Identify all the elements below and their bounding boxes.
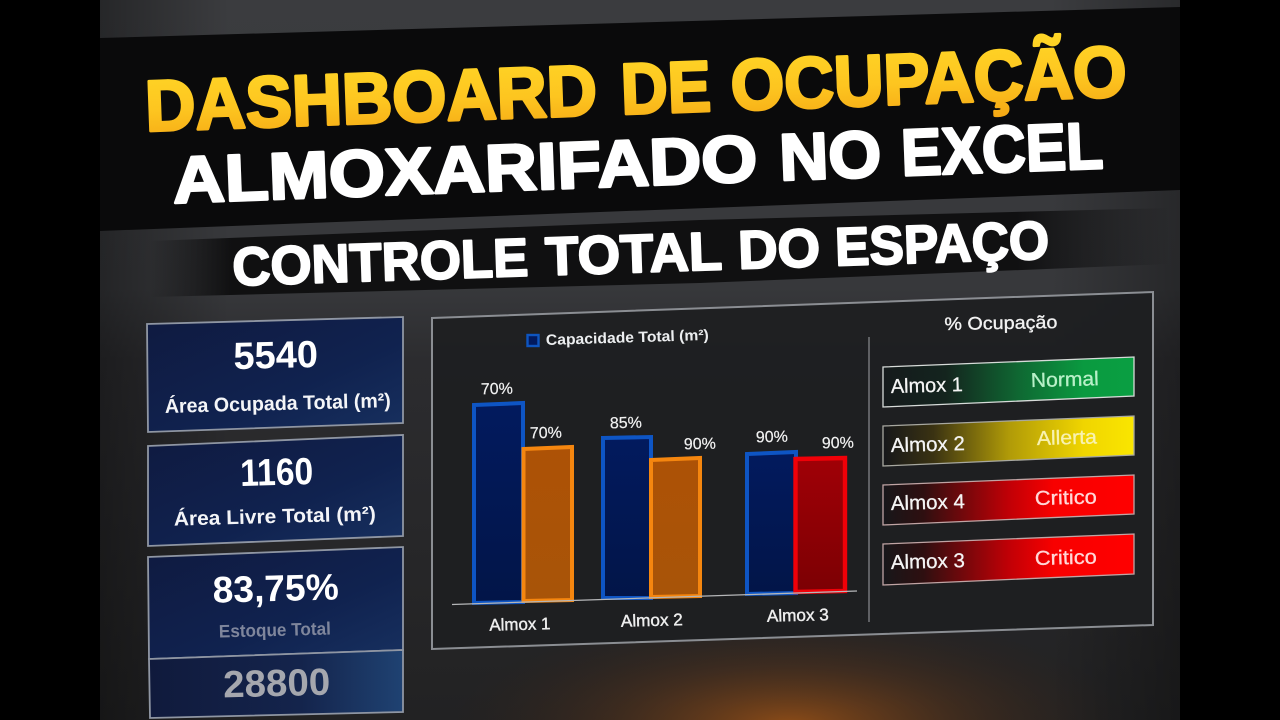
label: área ocupada: Área Ocupada Total (m²) [165, 389, 391, 418]
bar value labels [481, 381, 854, 453]
status: Almox 1 normal: Normal [1031, 368, 1099, 392]
status: Almox 4 crítico: Critico [1035, 486, 1097, 510]
status: Almox 3 crítico: Almox 3 [891, 550, 965, 574]
status: Almox 4 crítico: Almox 4 [891, 491, 965, 515]
title line 1: DE [619, 47, 712, 130]
category labels: Almox 2 [621, 610, 683, 631]
bar: Almox 3 ocupação [796, 458, 845, 592]
title line 1: DASHBOARD [144, 51, 598, 147]
bar: Almox 3 capacidade [747, 452, 796, 594]
title banner [100, 7, 1180, 231]
subtitle: ESPAÇO [834, 211, 1050, 278]
bar: Almox 2 ocupação [651, 458, 700, 597]
category labels: Almox 1 [489, 614, 551, 635]
status: Almox 1 normal: Almox 1 [891, 374, 963, 398]
subtitle: CONTROLE [231, 228, 529, 297]
title line 2: NO [778, 116, 883, 194]
title line 2: EXCEL [900, 108, 1104, 190]
status: Almox 4 crítico [883, 475, 1134, 525]
title line 1 [144, 31, 1128, 147]
title line 2 [171, 108, 1104, 217]
bar value labels: 90% [684, 436, 716, 453]
value: 1160: 1160 [240, 451, 314, 495]
bar: Almox 1 capacidade [474, 403, 523, 603]
bar value labels: 90% [822, 435, 854, 452]
status: Almox 2 alerta: Allerta [1037, 426, 1098, 450]
value: 83,75%: 83,75% [212, 566, 339, 611]
bar chart [452, 327, 857, 635]
label: estoque total: Estoque Total [219, 619, 331, 641]
status: Almox 2 alerta: Almox 2 [891, 433, 965, 457]
chart panel [432, 292, 1153, 649]
KPI card: 28800 [149, 650, 403, 718]
subtitle: DO [737, 218, 821, 281]
category labels [489, 605, 829, 635]
KPI card: estoque total [148, 547, 403, 659]
status: Almox 3 crítico [883, 534, 1134, 585]
status panel [883, 312, 1134, 585]
value: 5540: 5540 [233, 334, 318, 378]
bar value labels: 85% [610, 415, 642, 432]
title line 2: ALMOXARIFADO [171, 121, 759, 217]
subtitle [231, 211, 1050, 297]
category labels: Almox 3 [767, 605, 829, 626]
value: 28800: 28800 [223, 662, 331, 706]
KPI card: área ocupada [147, 317, 403, 432]
subtitle: TOTAL [544, 221, 723, 287]
divider [868, 337, 870, 622]
bar value labels: 70% [481, 381, 513, 398]
status heading: % Ocupação [944, 312, 1058, 334]
legend: Capacidade Total (m²) [546, 327, 709, 349]
status: Almox 2 alerta [883, 416, 1134, 466]
subtitle band [150, 208, 1170, 297]
status: Almox 1 normal [883, 357, 1134, 407]
bar: Almox 2 capacidade [603, 437, 651, 598]
KPI card: área livre [148, 435, 403, 546]
bar value labels: 90% [756, 429, 788, 446]
axis [452, 591, 857, 604]
bar value labels: 70% [530, 425, 562, 442]
label: área livre: Área Livre Total (m²) [174, 502, 376, 531]
bar: Almox 1 ocupação [524, 447, 572, 601]
status: Almox 3 crítico: Critico [1035, 546, 1097, 570]
title line 1: OCUPAÇÃO [729, 31, 1128, 126]
